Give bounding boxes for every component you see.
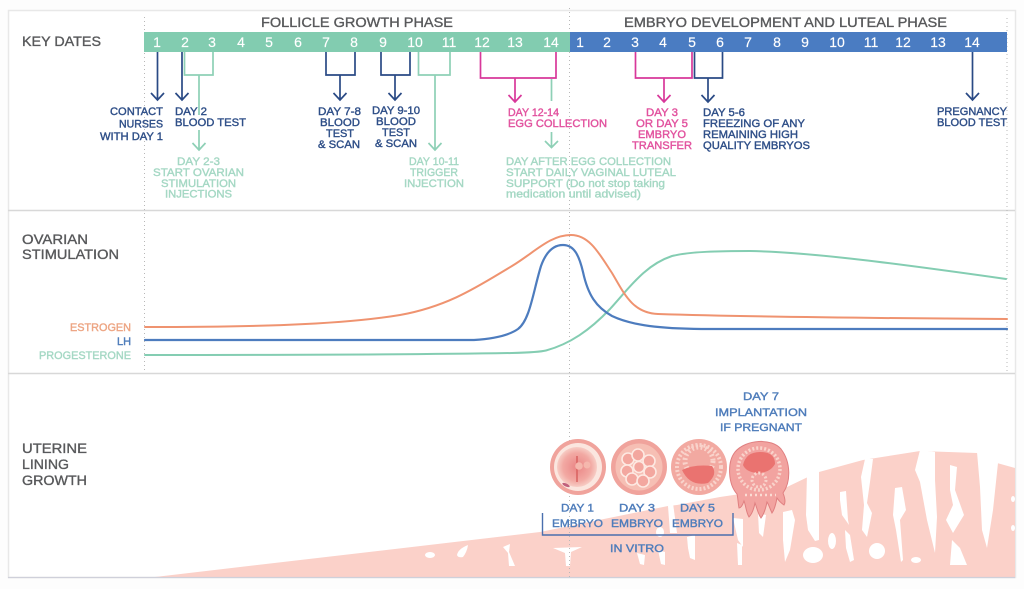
- text: freezing: REMAINING HIGH: [703, 129, 798, 141]
- text: luteal support: SUPPORT (Do not stop taking: [506, 178, 665, 190]
- timeline bar: follicle growth days: 6: [294, 34, 302, 50]
- text: day 2-3 ovarian stimulation: INJECTIONS: [165, 188, 232, 200]
- uterine lining illustration: [8, 450, 1015, 578]
- arrow: contact nurses: [151, 52, 164, 100]
- heading: ovarian stimulation: OVARIAN: [22, 232, 88, 247]
- text: day 2-3 ovarian stimulation: [153, 156, 244, 200]
- bracket arrow: freezing: [694, 52, 722, 102]
- text: pregnancy blood test: BLOOD TEST: [937, 117, 1007, 129]
- text: freezing: QUALITY EMBRYOS: [703, 140, 810, 152]
- timeline bar: embryo and luteal days: 7: [744, 34, 752, 50]
- heading: uterine lining growth: [22, 441, 87, 488]
- text: embryo transfer: DAY 3: [646, 107, 678, 119]
- icon: day 1 embryo: [550, 439, 606, 495]
- text: day 9-10: DAY 9-10: [372, 105, 420, 117]
- timeline bar: embryo and luteal days: 2: [603, 34, 611, 50]
- arrow: pregnancy blood test: [966, 52, 979, 100]
- text: pregnancy blood test: [937, 106, 1008, 129]
- text: freezing: [703, 107, 810, 152]
- curve: estrogen: [145, 235, 1007, 327]
- bracket arrow: embryo transfer: [636, 52, 692, 102]
- text: day 7-8: TEST: [326, 128, 354, 140]
- text: day 10-11 trigger: DAY 10-11: [409, 156, 459, 168]
- text: day 7-8: DAY 7-8: [318, 106, 361, 118]
- timeline bar: embryo and luteal days: 11: [864, 34, 878, 50]
- timeline bar: follicle growth days: 5: [265, 34, 273, 50]
- text: egg collection: [508, 107, 607, 130]
- timeline bar: follicle growth days: 7: [322, 34, 330, 50]
- curve: lh: [145, 245, 1007, 340]
- text: contact nurses: CONTACT: [110, 106, 163, 118]
- timeline bar: embryo and luteal days: 6: [716, 34, 724, 50]
- timeline bar: embryo and luteal days: 13: [930, 34, 946, 50]
- text: luteal support: START DAILY VAGINAL LUTEAL: [506, 167, 676, 179]
- timeline bar: follicle growth days: 9: [379, 34, 387, 50]
- text: day 9-10: TEST: [382, 127, 410, 139]
- text: day 7-8: BLOOD: [320, 117, 360, 129]
- text: day 7-8: [318, 106, 361, 151]
- text: day 1 embryo: [552, 502, 603, 530]
- text: pregnancy blood test: PREGNANCY: [937, 106, 1008, 118]
- timeline bar: embryo and luteal days: 8: [773, 34, 781, 50]
- icon: implanting embryo: [730, 441, 789, 518]
- text: day 7 implantation: [715, 391, 807, 434]
- legend: progesterone: PROGESTERONE: [39, 350, 131, 362]
- timeline bar: follicle growth days: 13: [507, 34, 523, 50]
- heading: embryo development and luteal phase: EMBRYO DEVELOPMENT AND LUTEAL PHASE: [624, 15, 947, 30]
- text: day 9-10: BLOOD: [376, 116, 416, 128]
- text: luteal support: DAY AFTER EGG COLLECTION: [506, 156, 671, 168]
- text: in vitro: IN VITRO: [610, 543, 664, 555]
- heading: key dates: KEY DATES: [22, 34, 101, 49]
- timeline bar: follicle growth days: [144, 32, 570, 52]
- text: day 10-11 trigger: INJECTION: [404, 178, 464, 190]
- text: day 2 blood test: [175, 106, 246, 129]
- text: day 2-3 ovarian stimulation: START OVARIAN: [153, 167, 244, 179]
- text: day 7 implantation: IF PREGNANT: [720, 422, 802, 434]
- heading: follicle growth phase: FOLLICLE GROWTH PHASE: [261, 15, 453, 30]
- bracket arrow: day 9-10: [381, 52, 410, 100]
- timeline bar: embryo and luteal days: 9: [801, 34, 809, 50]
- timeline bar: embryo and luteal days: 4: [659, 34, 667, 50]
- bracket arrow: egg collection: [480, 52, 556, 102]
- timeline bar: follicle growth days: 1: [153, 34, 161, 50]
- text: day 2-3 ovarian stimulation: STIMULATION: [161, 178, 236, 190]
- text: day 9-10: & SCAN: [375, 138, 417, 150]
- heading: ovarian stimulation: STIMULATION: [22, 247, 119, 262]
- bracket arrow: day 7-8: [326, 52, 355, 100]
- text: day 7 implantation: DAY 7: [743, 391, 779, 403]
- timeline bar: follicle growth days: 10: [407, 34, 423, 50]
- text: contact nurses: WITH DAY 1: [100, 131, 163, 143]
- icon: day 3 embryo: [611, 439, 667, 495]
- text: embryo transfer: EMBRYO: [638, 129, 686, 141]
- text: luteal support: [506, 156, 676, 200]
- text: contact nurses: [100, 106, 163, 143]
- timeline bar: follicle growth days: 12: [474, 34, 490, 50]
- curve: progesterone: [145, 251, 1006, 355]
- text: day 7-8: & SCAN: [318, 139, 360, 151]
- text: day 2-3 ovarian stimulation: DAY 2-3: [177, 156, 220, 168]
- bracket arrow: trigger injection: [418, 52, 450, 150]
- arrow: luteal support: [545, 79, 558, 148]
- legend: estrogen: ESTROGEN: [70, 322, 131, 334]
- text: day 1 embryo: EMBRYO: [552, 518, 603, 530]
- text: day 5 embryo: EMBRYO: [672, 518, 723, 530]
- text: freezing: FREEZING OF ANY: [703, 118, 806, 130]
- timeline bar: embryo and luteal days: 1: [576, 34, 584, 50]
- timeline bar: follicle growth days: 11: [442, 34, 456, 50]
- text: day 9-10: [372, 105, 420, 150]
- text: egg collection: DAY 12-14: [508, 107, 559, 119]
- text: contact nurses: NURSES: [119, 118, 163, 130]
- timeline bar: follicle growth days: 4: [237, 34, 245, 50]
- timeline bar: embryo and luteal days: 14: [964, 34, 980, 50]
- text: day 3 embryo: DAY 3: [619, 502, 655, 514]
- timeline bar: embryo and luteal days: 3: [631, 34, 639, 50]
- timeline bar: follicle growth days: 8: [350, 34, 358, 50]
- heading: uterine lining growth: GROWTH: [22, 473, 87, 488]
- text: day 10-11 trigger: [404, 156, 464, 190]
- text: freezing: DAY 5-6: [703, 107, 745, 119]
- text: day 3 embryo: [611, 502, 663, 530]
- text: day 3 embryo: EMBRYO: [611, 518, 663, 530]
- timeline bar: embryo and luteal days: 10: [829, 34, 845, 50]
- text: day 10-11 trigger: TRIGGER: [410, 167, 458, 179]
- text: embryo transfer: TRANSFER: [632, 140, 692, 152]
- text: embryo transfer: [632, 107, 692, 152]
- arrow: day 2 blood test: [176, 52, 188, 100]
- timeline bar: follicle growth days: 3: [208, 34, 216, 50]
- heading: uterine lining growth: UTERINE: [22, 441, 87, 456]
- icon: day 5 embryo: [671, 439, 727, 495]
- text: day 2 blood test: DAY 2: [175, 106, 207, 118]
- heading: uterine lining growth: LINING: [22, 457, 69, 472]
- text: luteal support: medication until advised): [506, 188, 641, 200]
- timeline bar: follicle growth days: 2: [181, 34, 189, 50]
- text: day 7 implantation: IMPLANTATION: [715, 407, 807, 419]
- chart: hormone curves: [145, 235, 1007, 355]
- text: embryo transfer: OR DAY 5: [636, 118, 688, 130]
- legend: lh: LH: [117, 336, 131, 348]
- timeline bar: embryo and luteal days: 5: [688, 34, 696, 50]
- bracket: in vitro: [542, 513, 733, 535]
- timeline bar: follicle growth days: 14: [543, 34, 559, 50]
- text: day 2 blood test: BLOOD TEST: [175, 117, 246, 129]
- text: egg collection: EGG COLLECTION: [508, 118, 607, 130]
- heading: ovarian stimulation: [22, 232, 119, 262]
- text: day 5 embryo: DAY 5: [680, 502, 715, 514]
- bracket arrow: ovarian stimulation: [184, 52, 213, 150]
- timeline bar: embryo and luteal days: 12: [895, 34, 911, 50]
- text: day 1 embryo: DAY 1: [561, 502, 594, 514]
- text: day 5 embryo: [672, 502, 723, 530]
- timeline bar: embryo and luteal days: [570, 32, 1007, 52]
